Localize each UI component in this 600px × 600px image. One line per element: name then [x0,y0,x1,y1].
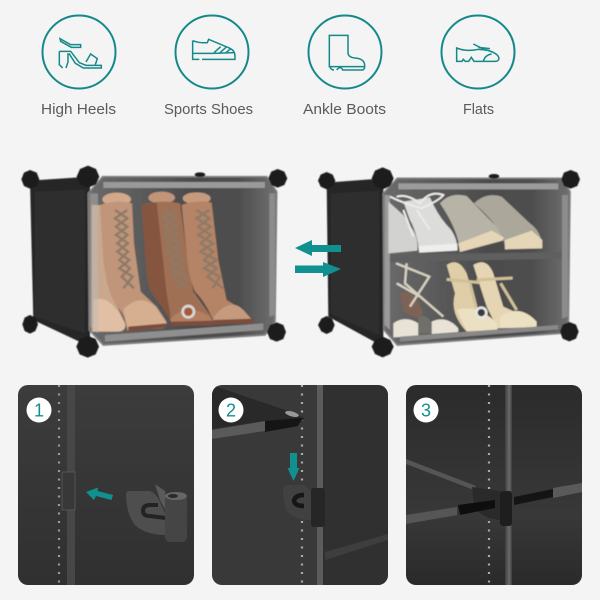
panel edge rail [67,385,75,585]
arrow [288,453,300,481]
panel: step 2 [212,385,388,585]
arrow: left [295,240,341,256]
product: cabinet with boots [21,166,287,358]
icon: sports shoes [176,16,248,88]
translucent frame [398,183,558,189]
badge: 2: 2 [226,400,236,420]
upper shelf rail [212,385,305,429]
panel: step 3 [406,385,582,585]
badge: 2 [218,398,244,422]
icon: flats [442,16,514,88]
arrow: right [295,262,341,277]
badge: 1: 1 [34,400,44,420]
glass door back [88,177,277,345]
connector joint [458,487,553,526]
icon: ankle boots [308,16,382,88]
glass door back [383,178,570,345]
boots [92,192,253,332]
icon: high heels [42,16,116,88]
badge: 1 [26,398,52,422]
label: Sports Shoes: Sports Shoes [164,101,253,118]
translucent frame [103,182,265,188]
laces [115,210,223,288]
door handle [181,305,195,319]
product: cabinet with shoes [318,167,580,357]
label: High Heels: High Heels [41,101,116,118]
connectors [318,167,580,357]
connector clip [292,487,325,527]
badge: 3: 3 [421,400,431,420]
label: Ankle Boots: Ankle Boots [303,101,386,118]
sneakers [388,194,542,253]
heels [393,262,537,337]
shelf rails [406,459,476,490]
door handle [475,306,488,319]
connector clip [126,484,187,542]
panel: step 1 [18,385,194,585]
connectors [21,166,287,358]
label: Flats: Flats [463,101,494,118]
side panel [327,178,383,347]
shelf [388,252,568,262]
side panel [30,177,90,347]
badge: 3 [414,398,438,422]
arrow [86,488,113,500]
